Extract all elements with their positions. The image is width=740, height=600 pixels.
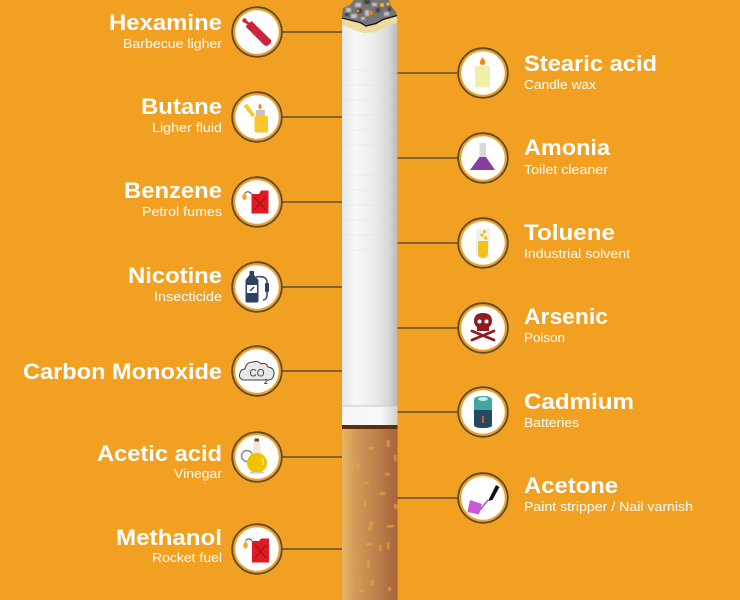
cigarette — [342, 0, 398, 600]
item: Acetic acid: Vinegar — [174, 466, 223, 481]
icon: CO2 cloud: CO — [250, 368, 265, 380]
item: Stearic acid — [458, 48, 657, 98]
cigarette paper — [342, 18, 398, 408]
connector lines — [282, 32, 458, 549]
icon: lighter — [244, 104, 268, 132]
item: Carbon Monoxide: Carbon Monoxide — [23, 359, 222, 384]
item: Butane — [141, 92, 282, 142]
item: Cadmium: Batteries — [524, 415, 580, 430]
item: Butane: Butane — [141, 94, 222, 119]
item: Toluene — [458, 218, 630, 268]
item: Amonia: Amonia — [524, 135, 611, 160]
item: Benzene: Petrol fumes — [142, 204, 223, 219]
burnt cream edge — [342, 16, 397, 33]
icon: vinegar bottle — [242, 438, 267, 474]
filter — [342, 429, 398, 600]
icon: candle — [475, 58, 490, 87]
item: Acetic acid — [97, 432, 282, 482]
item: Acetone: Acetone — [524, 473, 618, 498]
item: Arsenic: Arsenic — [524, 304, 608, 329]
item: Carbon Monoxide — [23, 346, 282, 396]
icon: test tube — [476, 228, 490, 259]
icon: barbecue lighter — [242, 18, 271, 46]
item: Cadmium: Cadmium — [524, 389, 634, 414]
icon: skull and crossbones — [472, 313, 494, 340]
item: Acetone: Paint stripper / Nail varnish — [524, 499, 693, 514]
item: Acetic acid: Acetic acid — [97, 441, 222, 466]
item: Cadmium — [458, 387, 634, 437]
icon: CO2 cloud — [239, 361, 274, 386]
item: Methanol: Rocket fuel — [152, 550, 222, 565]
icon: nail varnish — [468, 485, 500, 514]
item: Stearic acid: Stearic acid — [524, 51, 657, 76]
paper band — [342, 406, 398, 425]
item: Benzene: Benzene — [124, 178, 222, 203]
ash — [342, 0, 397, 26]
item: Toluene: Industrial solvent — [524, 246, 630, 261]
item: Nicotine — [128, 262, 282, 312]
item: Amonia: Toilet cleaner — [524, 162, 609, 177]
item: Methanol — [116, 524, 282, 574]
item: Hexamine: Barbecue ligher — [123, 36, 223, 51]
item: Nicotine: Insecticide — [154, 289, 222, 304]
icon: fuel can — [243, 538, 269, 562]
item: Amonia — [458, 133, 611, 183]
item: Hexamine — [109, 7, 282, 57]
icon: insecticide sprayer — [246, 271, 269, 302]
icon: flask — [470, 143, 495, 170]
item: Benzene — [124, 177, 282, 227]
item: Hexamine: Hexamine — [109, 10, 222, 35]
item: Acetone — [458, 473, 693, 523]
icon: jerry can — [242, 190, 268, 214]
dark band — [342, 425, 398, 429]
item: Toluene: Toluene — [524, 220, 615, 245]
item: Butane: Ligher fluid — [152, 120, 222, 135]
item: Stearic acid: Candle wax — [524, 77, 597, 92]
item: Methanol: Methanol — [116, 525, 222, 550]
icon: CO2 cloud: 2 — [264, 379, 268, 386]
icon: battery — [474, 396, 492, 428]
item: Arsenic: Poison — [524, 330, 565, 345]
item: Nicotine: Nicotine — [128, 263, 222, 288]
item: Arsenic — [458, 303, 608, 353]
